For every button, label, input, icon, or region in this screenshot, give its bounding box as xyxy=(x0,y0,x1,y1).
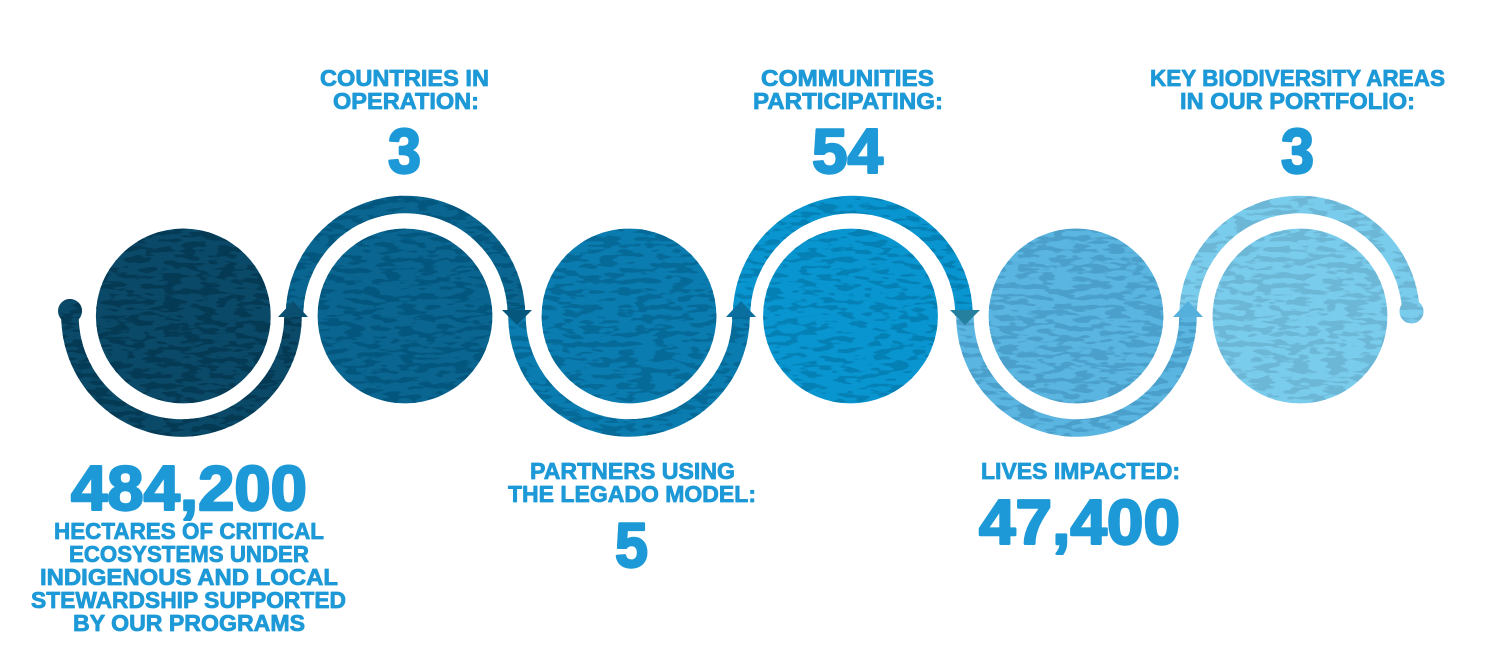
arrow: up, mid blue xyxy=(726,301,756,317)
stat: communities participating xyxy=(753,65,943,187)
segment 1: dark navy circle and arc xyxy=(58,229,293,428)
stat: hectares under stewardship: ECOSYSTEMS UNDER xyxy=(69,541,309,567)
arrow: up, light blue xyxy=(1173,301,1203,317)
arrow: up, navy xyxy=(278,301,308,317)
winding path with circles xyxy=(58,205,1424,428)
stat: key biodiversity areas: KEY BIODIVERSITY AREAS xyxy=(1150,65,1445,91)
segment 6: pale blue circle and arc xyxy=(1188,205,1424,403)
stat: partners using the Legado model: PARTNERS USING xyxy=(530,458,735,484)
stat: countries in operation: 3 xyxy=(388,117,421,187)
stat: lives impacted: LIVES IMPACTED: xyxy=(981,458,1180,484)
stat: hectares under stewardship: 484,200 xyxy=(71,454,307,524)
stat: countries in operation: COUNTRIES IN xyxy=(320,65,489,91)
segment 4: bright blue circle and arc xyxy=(742,205,964,403)
stat: communities participating: COMMUNITIES xyxy=(761,65,934,91)
stat: countries in operation: OPERATION: xyxy=(333,88,479,114)
stat: communities participating: PARTICIPATING: xyxy=(753,88,943,114)
stat: partners using the Legado model: THE LEGADO MODEL: xyxy=(508,481,756,507)
stat: lives impacted xyxy=(979,458,1180,558)
arrow: down, deep blue xyxy=(502,310,532,325)
stat: key biodiversity areas xyxy=(1150,65,1445,187)
stat: hectares under stewardship: INDIGENOUS AND LOCAL xyxy=(40,564,338,590)
arrow: down, teal blue xyxy=(950,310,980,325)
stat: key biodiversity areas: 3 xyxy=(1281,117,1314,187)
stat: hectares under stewardship: HECTARES OF CRITICAL xyxy=(54,518,324,544)
segment 3: mid blue circle and arc xyxy=(517,229,741,428)
stat: countries in operation xyxy=(320,65,489,187)
stat: hectares under stewardship xyxy=(31,454,346,636)
stat: communities participating: 54 xyxy=(812,117,883,187)
stat: hectares under stewardship: STEWARDSHIP SUPPORTED xyxy=(31,587,346,613)
segment 2: deep blue circle and arc xyxy=(294,205,516,403)
stat: partners using the Legado model: 5 xyxy=(615,511,648,581)
stat: key biodiversity areas: IN OUR PORTFOLIO: xyxy=(1180,88,1415,114)
stat: partners using the Legado model xyxy=(508,458,756,581)
stat: hectares under stewardship: BY OUR PROGRAMS xyxy=(73,610,305,636)
segment 5: light blue circle and arc xyxy=(965,229,1188,428)
stat: lives impacted: 47,400 xyxy=(979,488,1180,558)
